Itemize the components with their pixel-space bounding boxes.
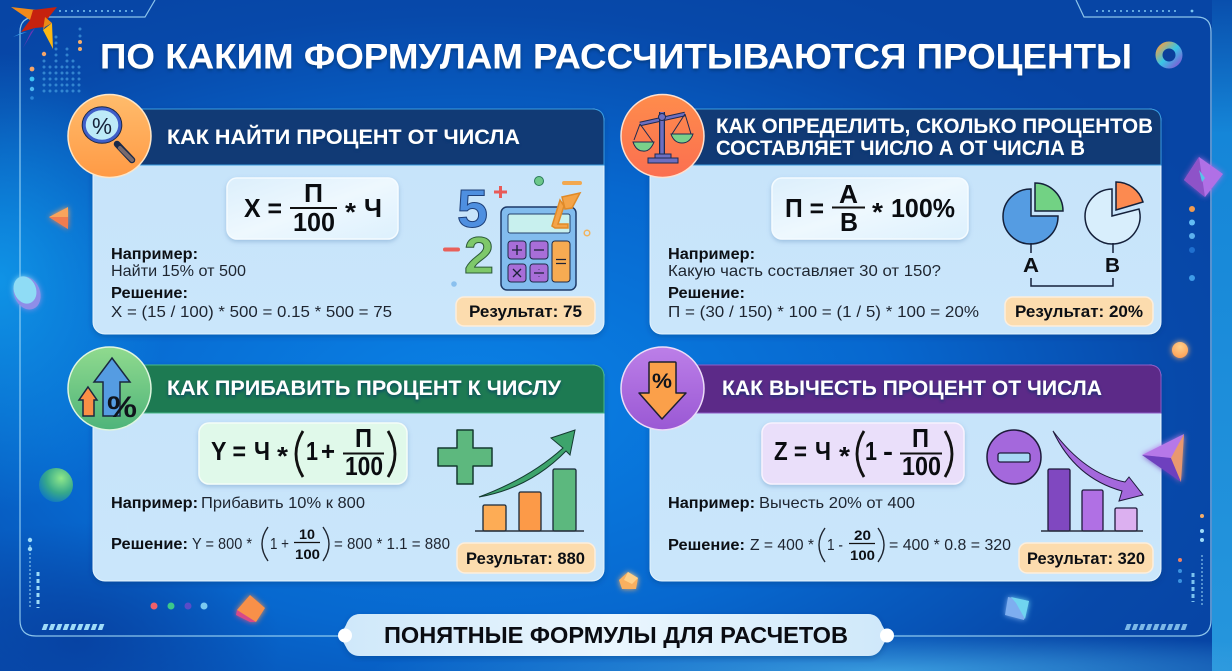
icon: purple triangle bbox=[1142, 434, 1184, 482]
formula: B bbox=[840, 207, 858, 237]
logo: bird bbox=[11, 7, 57, 49]
icon: plus and growth chart bbox=[438, 430, 584, 531]
panel header bbox=[650, 109, 1161, 165]
panel: subtract percent bbox=[621, 347, 1161, 581]
formula: 100% bbox=[891, 193, 955, 223]
example: Например: bbox=[111, 246, 198, 263]
result: Результат: 20% bbox=[1015, 303, 1143, 321]
example: 1 + bbox=[270, 536, 289, 553]
panel: add percent bbox=[68, 347, 604, 581]
formula: 100 bbox=[293, 207, 335, 237]
bottom pill: ПОНЯТНЫЕ ФОРМУЛЫ ДЛЯ РАСЧЕТОВ bbox=[384, 622, 848, 648]
formula: П bbox=[304, 178, 323, 208]
result bbox=[1005, 297, 1153, 326]
top dotted lines bbox=[59, 10, 1193, 12]
example bbox=[668, 495, 1011, 563]
panel header bbox=[93, 365, 604, 413]
example: 100 bbox=[850, 548, 875, 563]
icon: up arrows with percent: % bbox=[107, 391, 137, 424]
formula: Ч bbox=[254, 436, 270, 466]
formula: X = bbox=[244, 193, 282, 223]
example: Решение: bbox=[668, 285, 745, 302]
result bbox=[1019, 543, 1153, 573]
icon: colour ring bbox=[1159, 45, 1179, 65]
icon: down arrow with percent bbox=[621, 347, 704, 430]
panel body bbox=[93, 109, 604, 334]
example bbox=[668, 246, 979, 321]
icon: magnifier: % bbox=[92, 113, 112, 139]
example bbox=[111, 495, 450, 562]
formula: * bbox=[839, 441, 851, 471]
result: Результат: 880 bbox=[466, 550, 585, 568]
panel body bbox=[93, 365, 604, 581]
icon: magnifier bbox=[68, 94, 151, 178]
formula: Z = bbox=[774, 436, 807, 466]
formula bbox=[762, 423, 964, 484]
heading: КАК ВЫЧЕСТЬ ПРОЦЕНТ ОТ ЧИСЛА bbox=[722, 377, 1102, 400]
panel header bbox=[93, 109, 604, 165]
example: = 800 * 1.1 = 880 bbox=[334, 536, 450, 553]
example: Например: bbox=[111, 495, 198, 512]
example: Какую часть составляет 30 от 150? bbox=[668, 263, 941, 280]
panel body bbox=[650, 109, 1161, 334]
formula bbox=[772, 178, 968, 239]
heading bbox=[716, 115, 1153, 160]
example: Например: bbox=[668, 495, 755, 512]
formula bbox=[227, 178, 398, 239]
formula: * bbox=[277, 441, 289, 471]
result bbox=[457, 543, 595, 573]
formula: Ч bbox=[815, 436, 831, 466]
icon: scales bbox=[621, 94, 704, 178]
icon: calculator: 5 bbox=[457, 179, 488, 239]
example: Решение: bbox=[111, 536, 188, 553]
example: П = (30 / 150) * 100 = (1 / 5) * 100 = 20% bbox=[668, 304, 979, 321]
result bbox=[456, 297, 595, 326]
icon: up arrows with percent bbox=[68, 347, 151, 430]
panel: what percent A of B bbox=[621, 94, 1161, 334]
example: 10 bbox=[299, 527, 315, 542]
icon: calculator bbox=[445, 176, 590, 290]
example: X = (15 / 100) * 500 = 0.15 * 500 = 75 bbox=[111, 304, 392, 321]
chart: pie A and pie B: B bbox=[1105, 255, 1120, 277]
example bbox=[111, 246, 392, 321]
formula: 100 bbox=[902, 451, 941, 481]
formula: П = bbox=[785, 193, 824, 223]
example: 1 - bbox=[827, 537, 843, 554]
decorative shapes bbox=[9, 157, 1223, 627]
formula: * bbox=[345, 197, 357, 227]
chart: pie A and pie B bbox=[1003, 182, 1143, 286]
result: Результат: 75 bbox=[469, 303, 582, 321]
result: Результат: 320 bbox=[1027, 550, 1145, 568]
top-left dot pattern bbox=[30, 28, 82, 100]
formula: П bbox=[355, 423, 372, 453]
chart: pie A and pie B: A bbox=[1023, 255, 1039, 277]
formula: A bbox=[839, 179, 858, 209]
formula: 1 bbox=[306, 436, 318, 466]
example: Y = 800 * bbox=[192, 536, 252, 553]
example: Решение: bbox=[668, 537, 745, 554]
formula: П bbox=[912, 423, 929, 453]
bottom pill bbox=[338, 614, 894, 656]
formula: - bbox=[883, 436, 893, 466]
formula: 100 bbox=[345, 451, 383, 481]
heading: КАК ПРИБАВИТЬ ПРОЦЕНТ К ЧИСЛУ bbox=[167, 377, 562, 400]
panel header bbox=[650, 365, 1161, 413]
example: 20 bbox=[854, 528, 871, 543]
panel body bbox=[650, 365, 1161, 581]
formula bbox=[199, 423, 407, 484]
formula: Y = bbox=[211, 436, 246, 466]
panel: find percent of number bbox=[68, 94, 604, 334]
example: Решение: bbox=[111, 285, 188, 302]
example: 100 bbox=[295, 547, 320, 562]
formula: * bbox=[872, 197, 884, 227]
formula: Ч bbox=[364, 193, 382, 223]
title: ПО КАКИМ ФОРМУЛАМ РАССЧИТЫВАЮТСЯ ПРОЦЕНТЫ bbox=[100, 38, 1132, 76]
example: Например: bbox=[668, 246, 755, 263]
example: Вычесть 20% от 400 bbox=[759, 495, 915, 512]
heading: КАК ОПРЕДЕЛИТЬ, СКОЛЬКО ПРОЦЕНТОВ bbox=[716, 115, 1153, 138]
formula: + bbox=[321, 436, 335, 466]
example: Найти 15% от 500 bbox=[111, 263, 246, 280]
icon: minus and falling chart bbox=[987, 430, 1143, 531]
heading: КАК НАЙТИ ПРОЦЕНТ ОТ ЧИСЛА bbox=[167, 125, 520, 149]
icon: calculator: 2 bbox=[464, 227, 494, 285]
example: = 400 * 0.8 = 320 bbox=[889, 537, 1011, 554]
heading: СОСТАВЛЯЕТ ЧИСЛО А ОТ ЧИСЛА В bbox=[716, 137, 1085, 160]
formula: 1 bbox=[865, 436, 877, 466]
example: Прибавить 10% к 800 bbox=[201, 495, 365, 512]
icon: down arrow with percent: % bbox=[652, 370, 672, 393]
example: Z = 400 * bbox=[750, 537, 814, 554]
